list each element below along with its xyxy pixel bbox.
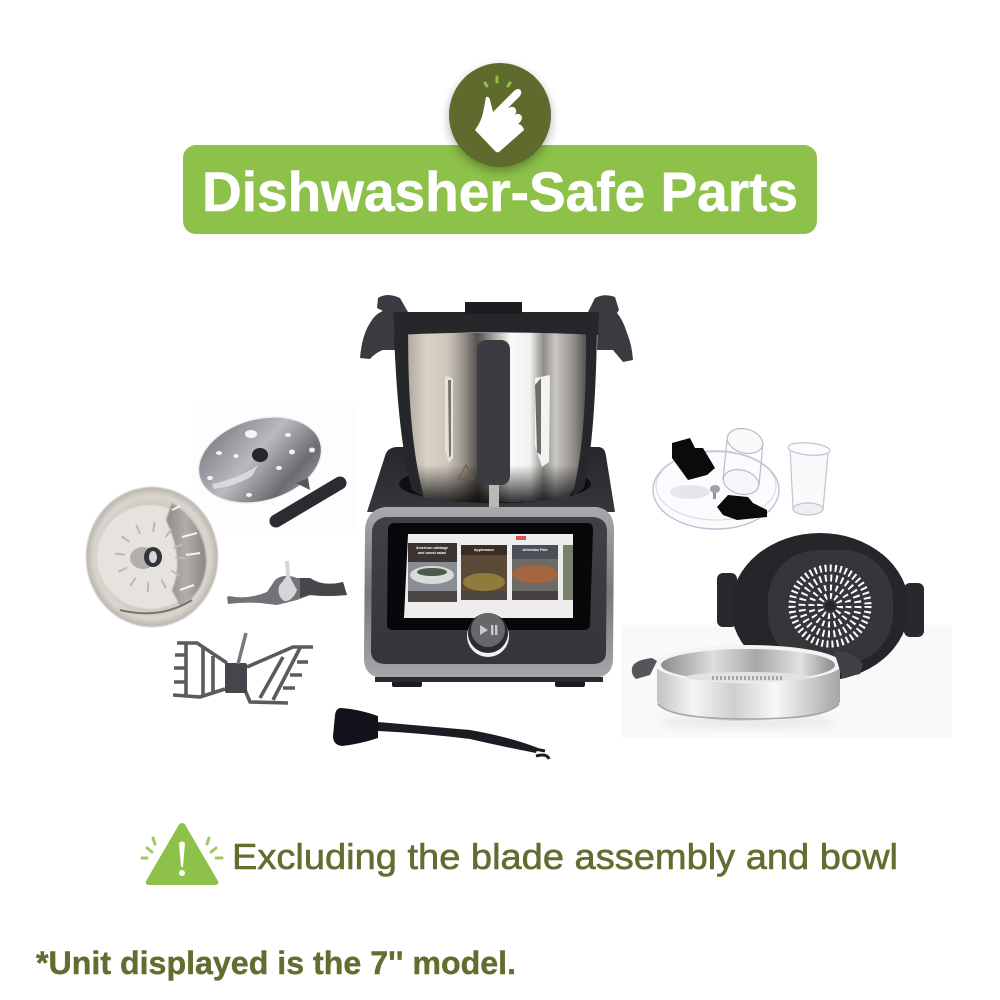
colander slits [792, 568, 868, 644]
machine base top [367, 447, 615, 512]
feed tube small [788, 441, 830, 515]
part: slicing disc and pusher [188, 403, 340, 521]
recipe card three [512, 545, 558, 600]
steel bowl [400, 333, 594, 502]
screen bezel [387, 523, 593, 630]
part: shredding drum [86, 487, 218, 627]
photo background patches [192, 405, 952, 738]
recipe card two [461, 545, 507, 600]
control knob [467, 613, 509, 657]
touch screen [404, 534, 573, 618]
recipe card one [408, 543, 457, 602]
bowl centre handle [477, 340, 510, 485]
icon: tapping hand badge [449, 63, 551, 171]
bowl rim [393, 312, 599, 335]
bowl inner ribs [445, 375, 550, 467]
recipe card one: American cabbage [416, 546, 448, 550]
note: exclusion text: Excluding the blade assembly and bowl [232, 836, 898, 877]
recipe card two: Applesauce [474, 548, 494, 552]
footnote: *Unit displayed is the 7'' model. [36, 945, 516, 981]
recipe card one: and carrot salad [418, 551, 446, 555]
part: spatula [333, 708, 549, 759]
recipe card three: Artichoke Pate [522, 548, 548, 552]
part: steamer basket with colander [717, 533, 924, 681]
front frame [364, 507, 614, 678]
lid knob [710, 485, 720, 499]
part: steel steamer tray [632, 645, 863, 728]
feed tube large [721, 425, 765, 498]
black clips [672, 438, 715, 480]
warning mark [458, 465, 474, 479]
icon: warning triangle [142, 823, 222, 885]
machine feet [375, 677, 603, 687]
title banner [183, 145, 817, 234]
part: kneading blade [227, 561, 347, 605]
paddle centre hub [225, 633, 247, 693]
bowl handles [360, 295, 633, 362]
recipe card four [563, 545, 573, 600]
part: clear lid and tubes [653, 425, 830, 529]
part: mixing paddle [173, 633, 313, 703]
pusher stick [276, 483, 340, 521]
product: multicooker machine [360, 295, 633, 687]
front panel [371, 517, 607, 664]
title text: Dishwasher-Safe Parts [202, 160, 798, 223]
lid cap [465, 302, 522, 314]
